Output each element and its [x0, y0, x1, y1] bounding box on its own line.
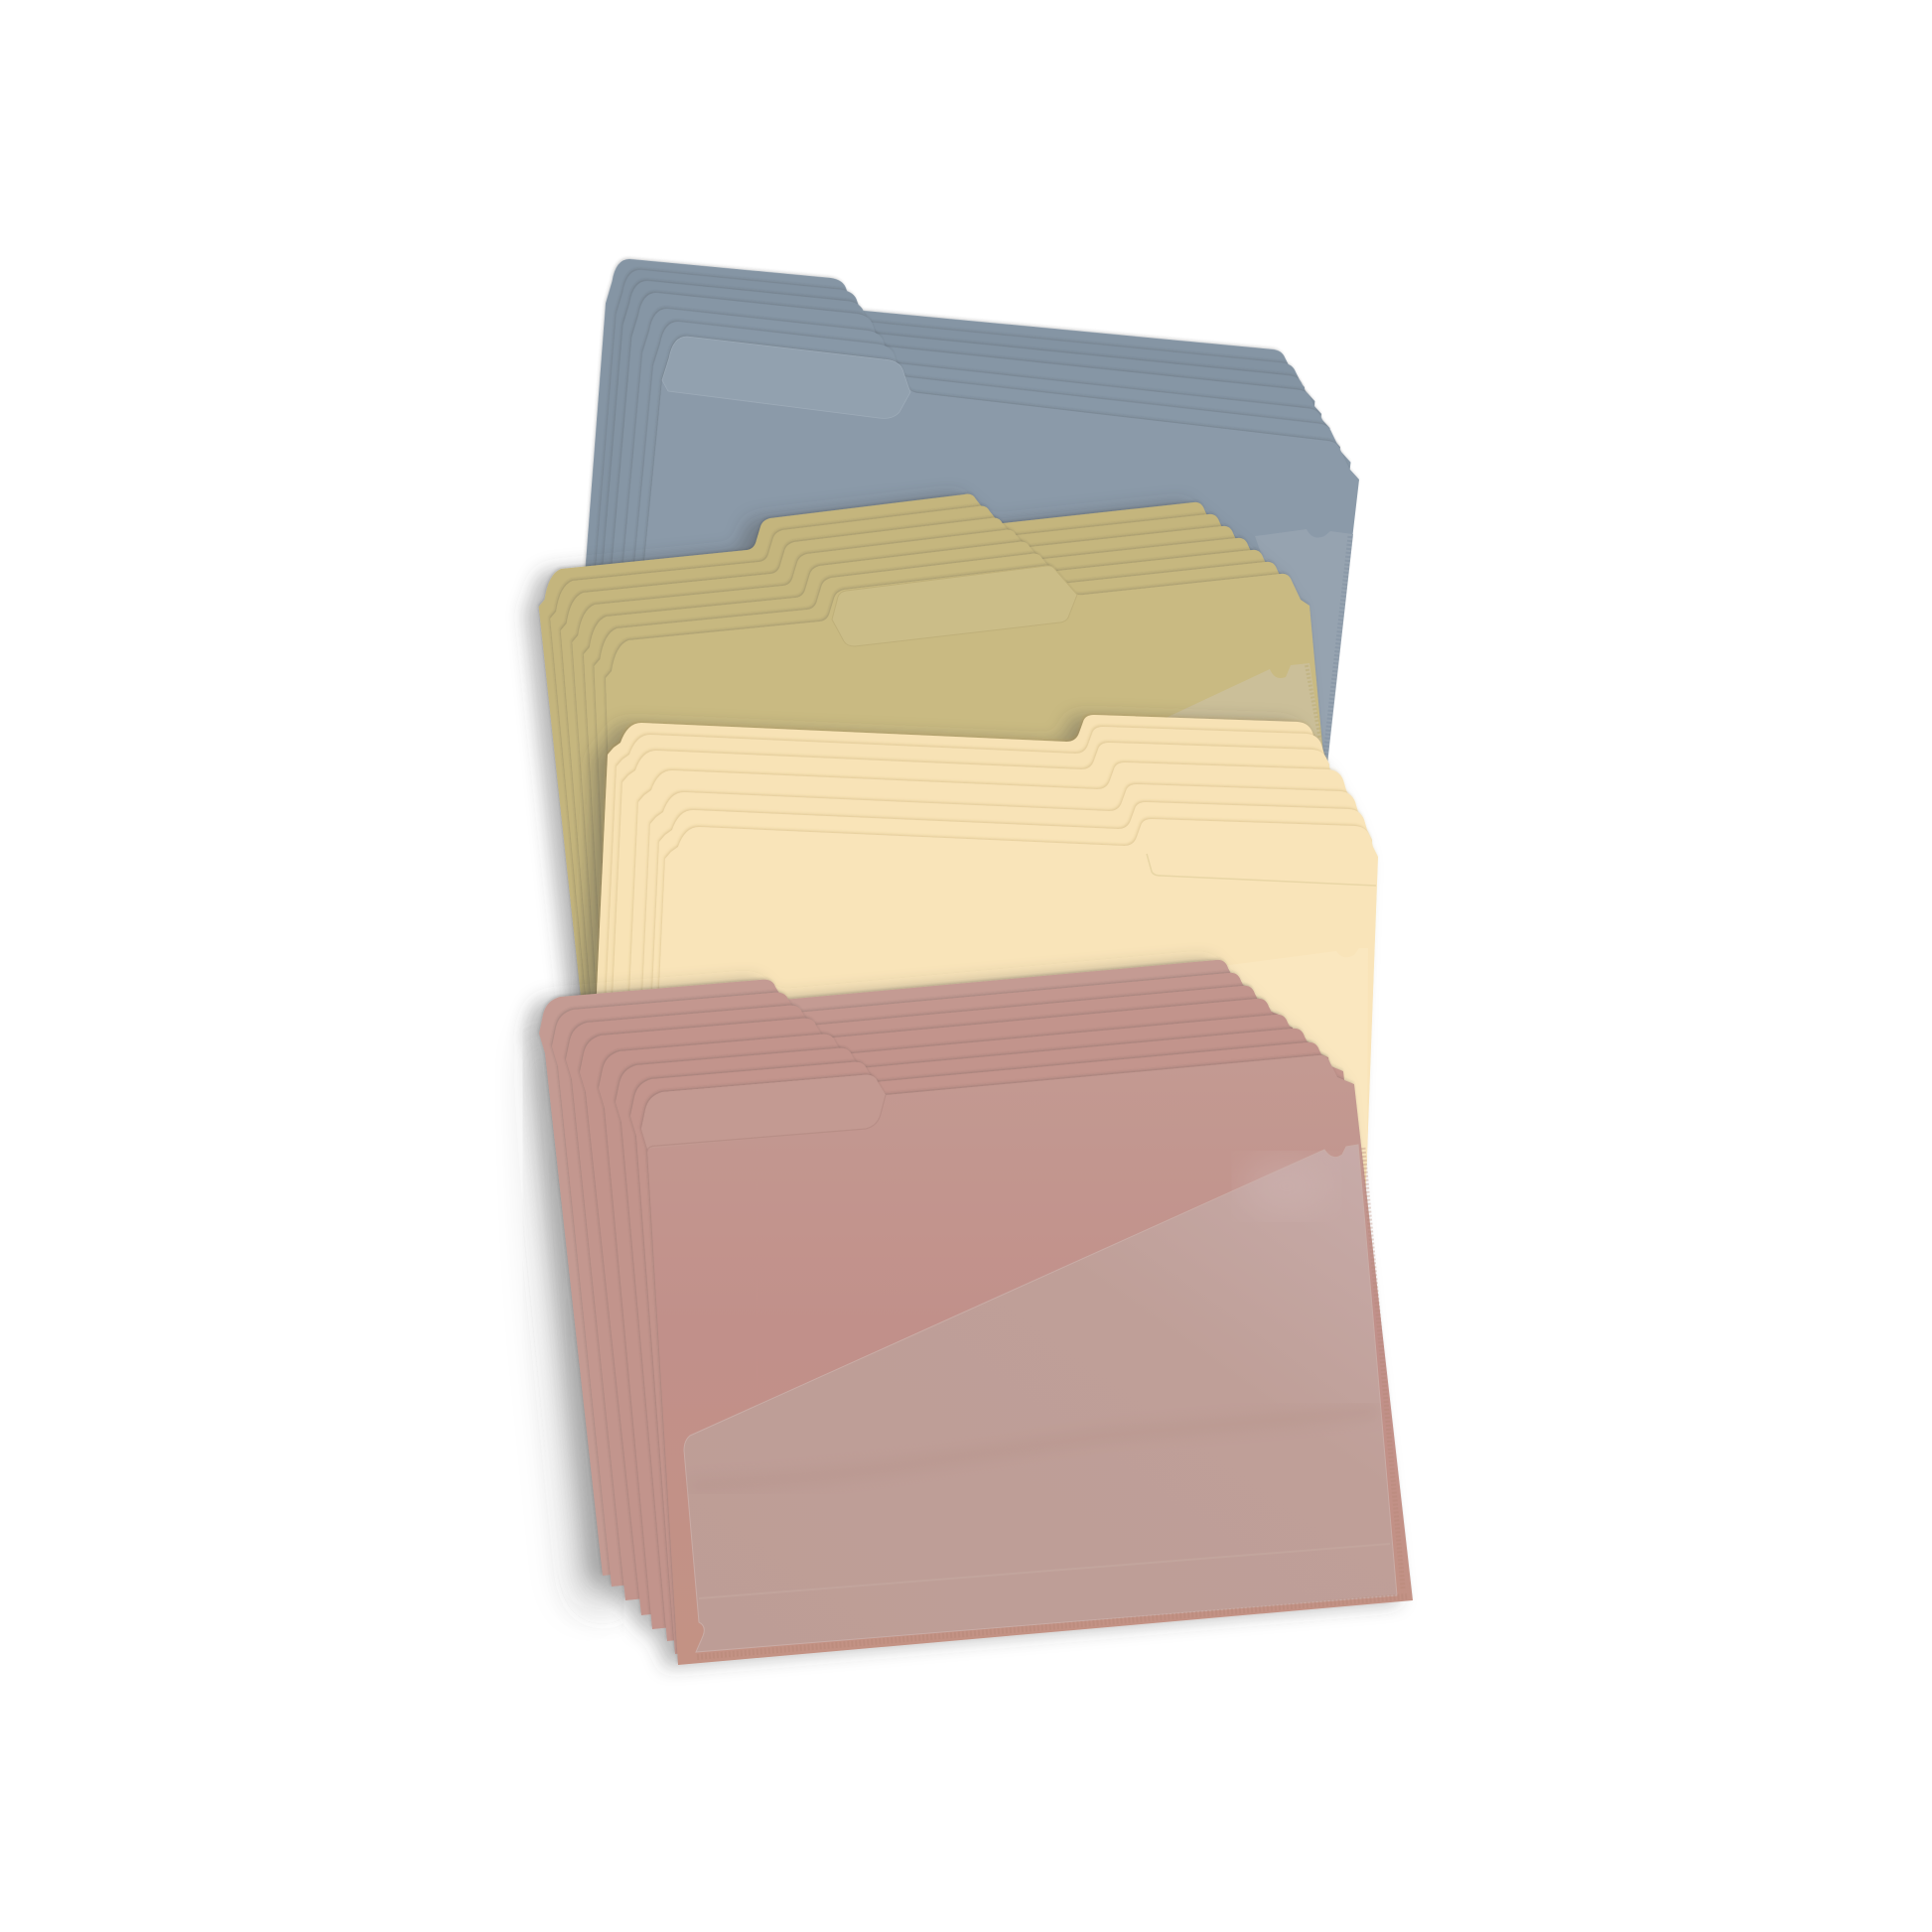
blue pocket ribbed edge	[1325, 536, 1350, 755]
blue folder clear pocket corner	[1255, 529, 1353, 764]
rose folder tab strip	[641, 1075, 886, 1149]
rose folder tab crease	[647, 1095, 886, 1152]
pocket lower crease	[699, 1544, 1390, 1598]
khaki front folder	[606, 566, 1359, 1152]
rose front folder	[641, 1055, 1413, 1665]
pocket highlight	[1241, 1157, 1332, 1216]
blue folder tab strip	[662, 337, 910, 418]
khaki folder clear pocket corner	[1162, 663, 1323, 755]
rose bottom ribbed edge	[697, 1596, 1407, 1657]
soft shadow of rose stack	[531, 1033, 616, 1608]
khaki pocket ribbed edge	[1307, 665, 1320, 740]
stack: rose folders	[531, 960, 1413, 1665]
khaki folder tab strip	[832, 566, 1077, 646]
blue front folder	[616, 337, 1359, 854]
stack: khaki folders	[539, 494, 1359, 1152]
rose folder clear pocket	[684, 1145, 1397, 1652]
stack: blue-grey folders	[558, 244, 1359, 854]
cream front folder	[645, 819, 1378, 1291]
cream folder tab crease	[1147, 854, 1376, 886]
pocket darker fold band	[690, 1411, 1379, 1486]
cream folder clear pocket corner	[1222, 948, 1368, 1162]
stack: cream folders	[588, 715, 1378, 1291]
rose right ribbed edge	[1363, 1148, 1403, 1588]
